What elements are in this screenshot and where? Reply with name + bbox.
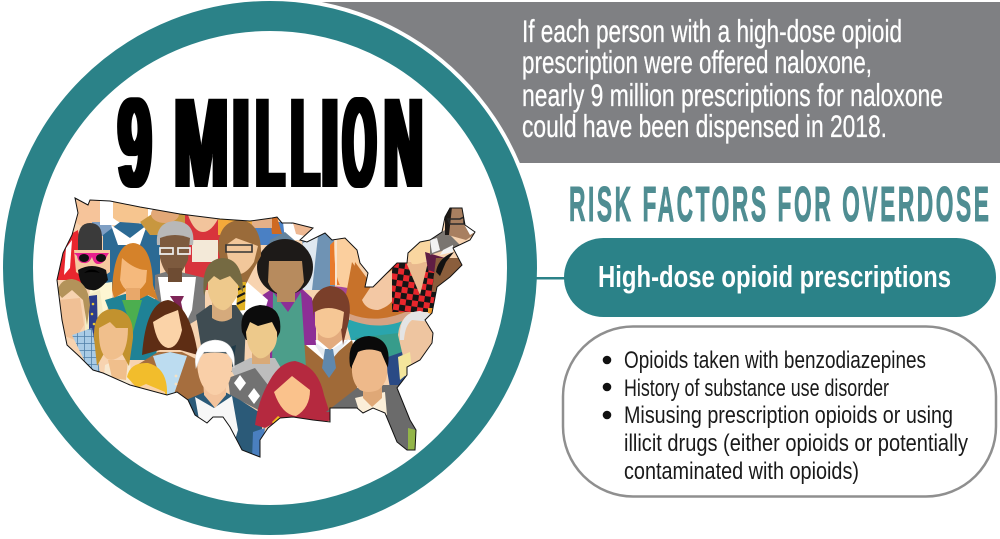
figure: man with glasses and brown hair	[218, 220, 268, 325]
map of USA filled with people	[50, 190, 480, 460]
headline: 9 million: M	[174, 72, 229, 215]
figure: white jacket lapel	[302, 237, 318, 290]
figure: man with black hair and grey jacket	[326, 336, 416, 450]
headline: 9 million: O	[343, 72, 376, 215]
map outline	[57, 198, 475, 457]
figure: man with white hair and dark teal jacket	[186, 340, 262, 460]
headline: 9 million: I	[232, 72, 249, 215]
figure: person with afro	[257, 239, 316, 370]
headline: 9 million: I	[320, 72, 338, 215]
grey banner	[300, 2, 1000, 163]
figure: blond child	[127, 363, 167, 396]
figure: man with glasses in the north-east	[425, 207, 478, 292]
banner text	[522, 13, 943, 144]
white gap around circle	[0, 0, 541, 539]
banner text: prescription were offered naloxone,	[522, 44, 872, 80]
figure: woman with orange hair	[330, 238, 360, 308]
figure: man with gray hair and glasses	[155, 221, 205, 330]
figure: woman with long brown hair	[138, 300, 204, 400]
rounded box: other risk factors	[563, 326, 996, 496]
back row figures	[72, 196, 313, 290]
teal ring circle	[18, 16, 522, 520]
figure: blue plaid shirt	[72, 328, 100, 372]
figure: person with vest and brown hair	[304, 286, 358, 410]
figure: red plaid shirt	[392, 240, 436, 314]
pill: high-dose opioid prescriptions	[564, 238, 996, 317]
figure: woman with teal top	[346, 262, 410, 357]
figure: woman with red hair	[252, 361, 332, 460]
heading: risk factors for overdose: RISK FACTORS FOR OVERDOSE	[569, 177, 989, 233]
figure: woman with gold hair	[94, 309, 133, 390]
headline: 9 million: 9	[118, 72, 151, 215]
headline: 9 million: L	[290, 72, 319, 215]
connector line	[536, 277, 565, 280]
figure: man with black hair and argyle sweater	[228, 305, 282, 412]
headline: 9 million	[117, 72, 423, 215]
figure: blue jacket background	[302, 233, 335, 290]
figure: man with brown side hair and dark jacket	[196, 258, 246, 372]
rounded box: other risk factors: History of substance use disorder	[624, 375, 889, 402]
headline: 9 million: L	[256, 72, 284, 215]
rounded box: other risk factors: contaminated with opioids)	[624, 458, 859, 485]
figure: man with bright pink glasses	[58, 223, 112, 312]
figure: man with white hair, north-east	[387, 311, 432, 386]
headline: 9 million: N	[384, 72, 423, 215]
figure: woman with orange hair and teal jacket	[105, 243, 160, 360]
figure: left man with tan hair	[58, 279, 103, 342]
